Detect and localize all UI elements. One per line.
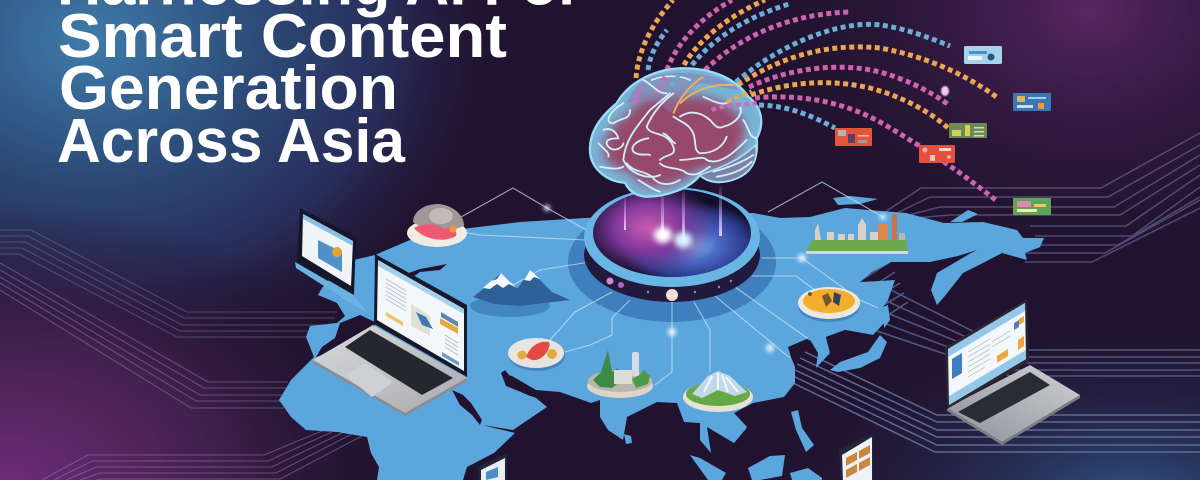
- Black Sea: [403, 264, 447, 279]
- keyboard: [345, 330, 453, 395]
- icon: rock and food plate: [407, 204, 467, 247]
- device base: [584, 208, 760, 302]
- title line 4: Across Asia: [57, 107, 406, 176]
- outer edge: [590, 68, 761, 197]
- Mediterranean Sea: [316, 315, 375, 357]
- upper lobe tint: [627, 73, 740, 113]
- icon: garden with monument: [587, 350, 653, 398]
- circuit lines: upper right: [885, 133, 1200, 262]
- inner data dashes: [635, 75, 757, 110]
- card: green: [1013, 198, 1051, 215]
- device halo shadow on map: [568, 202, 776, 322]
- base: [313, 325, 467, 413]
- sparkle: [941, 86, 949, 96]
- card: blue: [1013, 93, 1051, 111]
- icon: yellow food plate: [798, 287, 860, 322]
- Borneo: [748, 455, 785, 480]
- tablet: bottom center right: [839, 433, 874, 480]
- laptop: large left: [313, 254, 467, 416]
- card: red: [919, 145, 955, 163]
- screen: [948, 303, 1026, 405]
- status lights: [606, 278, 732, 301]
- Philippines: [791, 410, 814, 452]
- central device: [584, 185, 760, 302]
- Persian Gulf: [501, 370, 590, 403]
- brain silhouette: [590, 68, 761, 197]
- brain: [590, 68, 761, 197]
- New Guinea edge: [790, 468, 822, 480]
- cerebellum: [700, 145, 756, 182]
- title: [57, 0, 582, 176]
- circuit lines: left upper: [0, 230, 337, 337]
- card: light blue: [964, 46, 1002, 64]
- title line 2: Smart Content: [58, 2, 507, 71]
- laptop: large right: [945, 299, 1080, 445]
- circuit lines: bottom left: [42, 431, 362, 480]
- connector glow points: [544, 205, 886, 352]
- content cards: [835, 46, 1051, 215]
- Sakhalin: [883, 305, 890, 328]
- device rim: [584, 187, 760, 287]
- screen: [377, 260, 464, 371]
- connector lines: [450, 182, 883, 385]
- title line 3: Generation: [59, 54, 398, 123]
- icon: city skyline: [806, 214, 908, 254]
- screen bezel: [945, 299, 1029, 409]
- continent landmass: [279, 208, 1044, 480]
- keyboard: [958, 372, 1050, 423]
- Sumatra: [690, 455, 726, 480]
- icon: snow mountains: [470, 270, 570, 317]
- light beams: [624, 186, 722, 240]
- circuit lines: left lower: [0, 263, 288, 408]
- Sri Lanka: [624, 434, 632, 444]
- base: [947, 365, 1080, 442]
- inner rose tissue: [603, 96, 745, 187]
- tablet: bottom center left: [478, 453, 507, 480]
- icon: food plate: [508, 338, 565, 371]
- dashed data arcs: [636, 0, 998, 202]
- card: orange: [835, 128, 872, 146]
- circuit lines: lower right: [791, 352, 1200, 452]
- Britain island: [360, 265, 372, 278]
- center glow: [654, 227, 692, 248]
- trackpad: [345, 363, 393, 397]
- screen bezel: [374, 254, 467, 377]
- device core: [593, 190, 751, 277]
- map of Asia: [279, 196, 1044, 480]
- Red Sea: [452, 390, 482, 425]
- Japan: [830, 335, 887, 372]
- circuit lines: middle right: [830, 262, 1200, 376]
- island east of Russia: [950, 210, 978, 222]
- laptop: left tablet: [295, 208, 367, 312]
- gyri: [598, 76, 757, 192]
- golden synapse lines: [673, 77, 733, 113]
- icon: peak pavilion: [683, 371, 753, 412]
- Sea of Japan: [826, 330, 873, 360]
- card: olive green: [949, 123, 987, 138]
- island north of Russia: [833, 196, 878, 205]
